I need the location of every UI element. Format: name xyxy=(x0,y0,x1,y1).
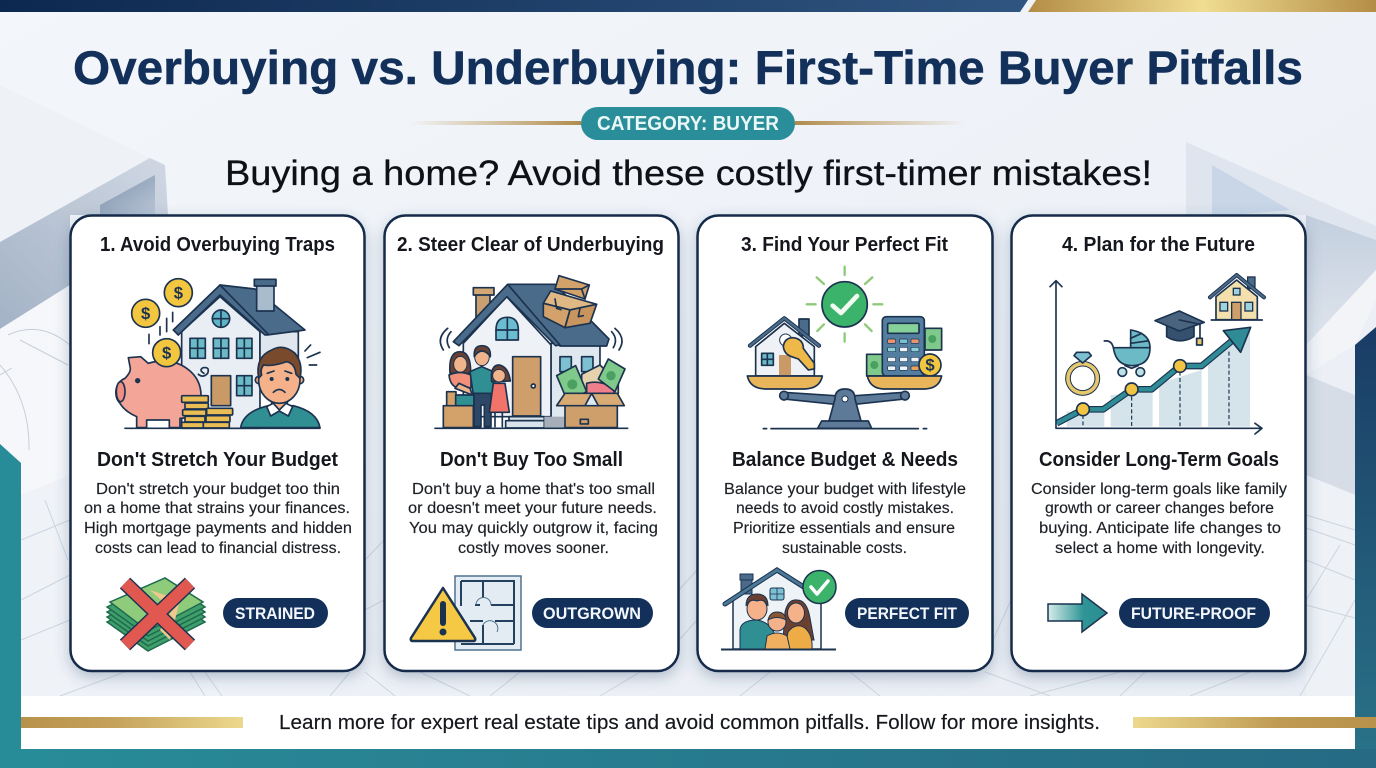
icon: house, piggy bank and worried buyer: $ xyxy=(174,283,184,302)
icon: crowded small house with family and boxes xyxy=(435,276,628,428)
top navy bar xyxy=(0,0,1028,12)
body text xyxy=(408,481,658,557)
icon: crossed-out cash xyxy=(107,578,205,651)
body text: Consider long-term goals like family xyxy=(1031,481,1287,498)
right teal edge xyxy=(1355,327,1376,768)
body text xyxy=(1031,481,1287,557)
top gold bar xyxy=(1028,0,1376,12)
title: Overbuying vs. Underbuying: First-Time Buyer Pitfalls xyxy=(73,41,1303,94)
footer strip xyxy=(21,696,1376,749)
tag: perfect fit xyxy=(845,598,969,628)
tag: outgrown: OUTGROWN xyxy=(543,604,641,623)
body text xyxy=(724,481,966,557)
tagline: Buying a home? Avoid these costly first-timer mistakes! xyxy=(225,154,1152,193)
body text: on a home that strains your finances. xyxy=(84,500,350,517)
heading: 4. Plan for the Future xyxy=(1062,234,1255,256)
body text: select a home with longevity. xyxy=(1055,540,1265,557)
subheading: Don't Buy Too Small xyxy=(440,449,623,471)
subheading: Don't Stretch Your Budget xyxy=(97,449,338,471)
bottom teal band xyxy=(0,749,1376,768)
body text: Prioritize essentials and ensure xyxy=(733,520,955,537)
tag: strained: STRAINED xyxy=(235,604,315,623)
panel: avoid overbuying traps xyxy=(70,216,364,671)
body text: Don't stretch your budget too thin xyxy=(96,481,340,498)
heading: 2. Steer Clear of Underbuying xyxy=(397,234,664,256)
body text: costly moves sooner. xyxy=(458,540,609,557)
right gold bar xyxy=(1133,717,1376,728)
body text: High mortgage payments and hidden xyxy=(84,520,352,537)
tag: outgrown xyxy=(532,598,653,628)
tag: future-proof: FUTURE-PROOF xyxy=(1131,604,1256,623)
body text: costs can lead to financial distress. xyxy=(95,540,341,557)
heading: 3. Find Your Perfect Fit xyxy=(741,234,948,256)
icon: forward arrow xyxy=(1048,594,1107,632)
body text: sustainable costs. xyxy=(782,540,907,557)
body text: growth or career changes before xyxy=(1045,500,1274,517)
category badge: CATEGORY: BUYER xyxy=(597,113,780,135)
subheading: Balance Budget & Needs xyxy=(732,449,958,471)
body text: Don't buy a home that's too small xyxy=(412,481,655,498)
icon: balanced scale with house and calculator: $ xyxy=(925,355,935,374)
left teal edge xyxy=(0,444,21,768)
body text: buying. Anticipate life changes to xyxy=(1039,520,1281,537)
icon: happy family in house xyxy=(721,570,836,650)
icon: warning sign over floor plan xyxy=(411,576,521,650)
panel: plan for the future xyxy=(1012,216,1306,671)
category badge xyxy=(410,107,966,140)
icon: growth chart with life milestones xyxy=(1050,275,1264,434)
icon: house, piggy bank and worried buyer: $ xyxy=(141,304,151,323)
icon: house, piggy bank and worried buyer: $ xyxy=(162,343,172,362)
panel: find your perfect fit xyxy=(698,216,992,671)
body text: Balance your budget with lifestyle xyxy=(724,481,966,498)
body text: You may quickly outgrow it, facing xyxy=(409,520,658,537)
tag: future-proof xyxy=(1119,598,1270,628)
body text: needs to avoid costly mistakes. xyxy=(736,500,954,517)
subheading: Consider Long-Term Goals xyxy=(1039,449,1279,471)
icon: balanced scale with house and calculator xyxy=(747,267,942,429)
footer text: Learn more for expert real estate tips and avoid common pitfalls. Follow for more insights. xyxy=(279,712,1100,734)
tag: strained xyxy=(223,598,328,628)
heading: 1. Avoid Overbuying Traps xyxy=(100,234,335,256)
body text: or doesn't meet your future needs. xyxy=(408,500,657,517)
left gold bar xyxy=(21,717,243,728)
icon: house, piggy bank and worried buyer xyxy=(116,279,320,428)
panel: steer clear of underbuying xyxy=(384,216,678,671)
tag: perfect fit: PERFECT FIT xyxy=(857,604,958,623)
body text xyxy=(84,481,352,557)
